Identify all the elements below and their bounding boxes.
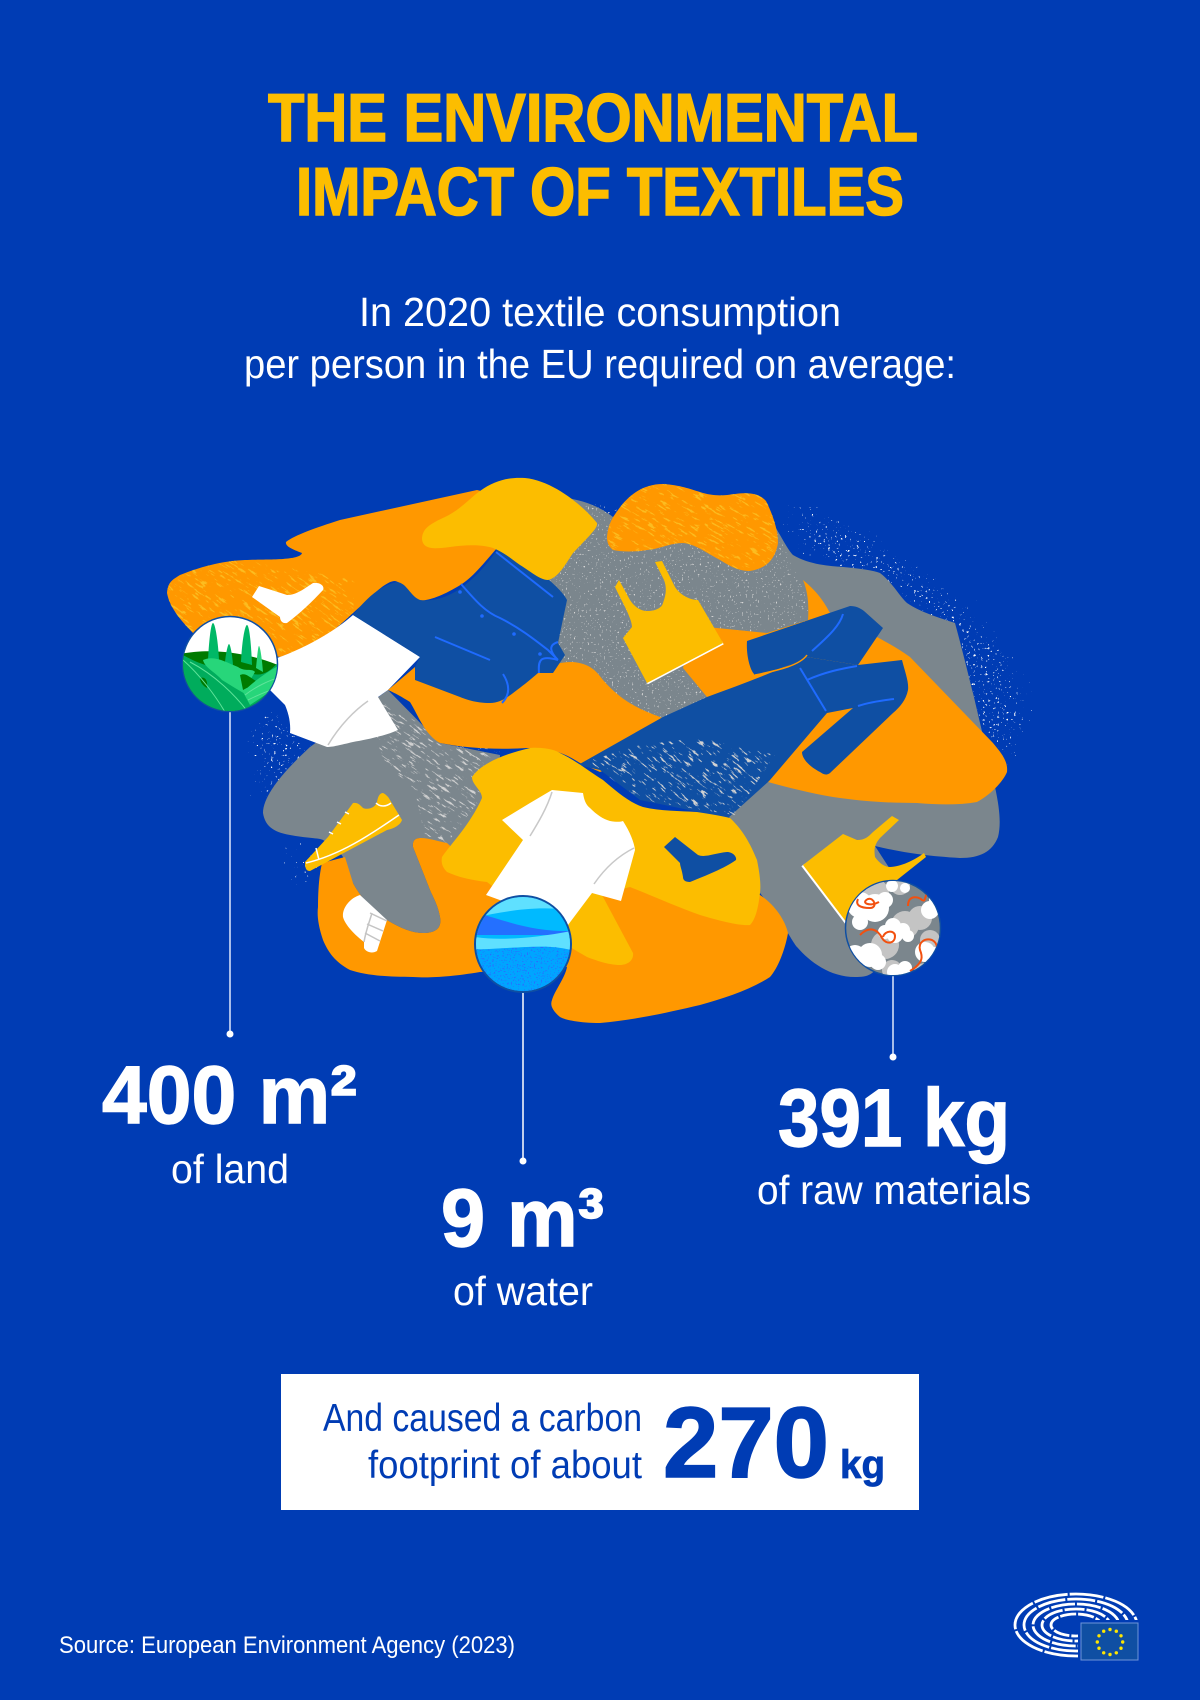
icon: white sock [252,583,323,623]
grey blob: lower left [263,690,500,933]
title [268,80,918,230]
subtitle: per person in the EU required on average: [244,341,956,387]
orange band: centre [388,662,700,772]
callout: carbon footprint [281,1374,919,1510]
subtitle [244,289,956,387]
white t-shirt: top left [270,615,420,747]
grey blob: right and centre [530,497,1000,977]
source: Source: European Environment Agency (2023) [59,1632,515,1659]
speckle clouds on background [240,490,1035,900]
orange blob: top left with texture [121,472,520,745]
stat: land [102,1050,357,1192]
stat: land: 400 m² [102,1050,357,1141]
illustration: pile of clothes [121,410,1035,1023]
leader line: raw materials [890,945,896,1060]
white streaks on jeans [547,644,813,909]
stat: raw materials: of raw materials [757,1167,1031,1213]
orange blob: lower [318,838,788,1023]
icon: land circle [180,616,280,720]
leader line: land [226,710,234,1038]
callout: carbon footprint: And caused a carbon [323,1397,642,1440]
title: THE ENVIRONMENTAL [268,80,918,156]
orange blob: top with texture [569,410,816,645]
stat: water [441,1173,604,1314]
icon: blue sock [664,837,736,882]
stat: raw materials: 391 kg [778,1073,1010,1164]
callout: carbon footprint: 270 [663,1387,829,1499]
title: IMPACT OF TEXTILES [296,154,904,230]
stat: water: 9 m³ [441,1173,604,1264]
orange blob: right [683,580,1007,804]
blue jeans [578,606,908,818]
yellow blob: lower [442,748,760,965]
leader line: water [520,990,526,1164]
stat: water: of water [453,1268,593,1314]
subtitle: In 2020 textile consumption [359,289,841,335]
grey speckle area: centre [530,500,808,722]
callout: carbon footprint: kg [840,1443,885,1487]
grey streaks: lower left [305,640,567,903]
yellow blob: top [422,478,597,580]
icon: EU flag [1081,1623,1138,1660]
icon: white shoe [343,895,387,952]
icon: yellow sneaker [305,793,402,871]
yellow tank top: bottom right [803,816,926,923]
icon: water circle [475,896,571,995]
icon: European Parliament logo [1015,1594,1144,1664]
callout: carbon footprint: footprint of about [368,1444,642,1487]
yellow tank top [615,561,723,683]
blue jacket [353,550,567,703]
stat: land: of land [171,1146,289,1192]
white t-shirt: bottom [486,790,635,925]
icon: raw materials circle [844,880,942,976]
stat: raw materials [757,1073,1031,1213]
